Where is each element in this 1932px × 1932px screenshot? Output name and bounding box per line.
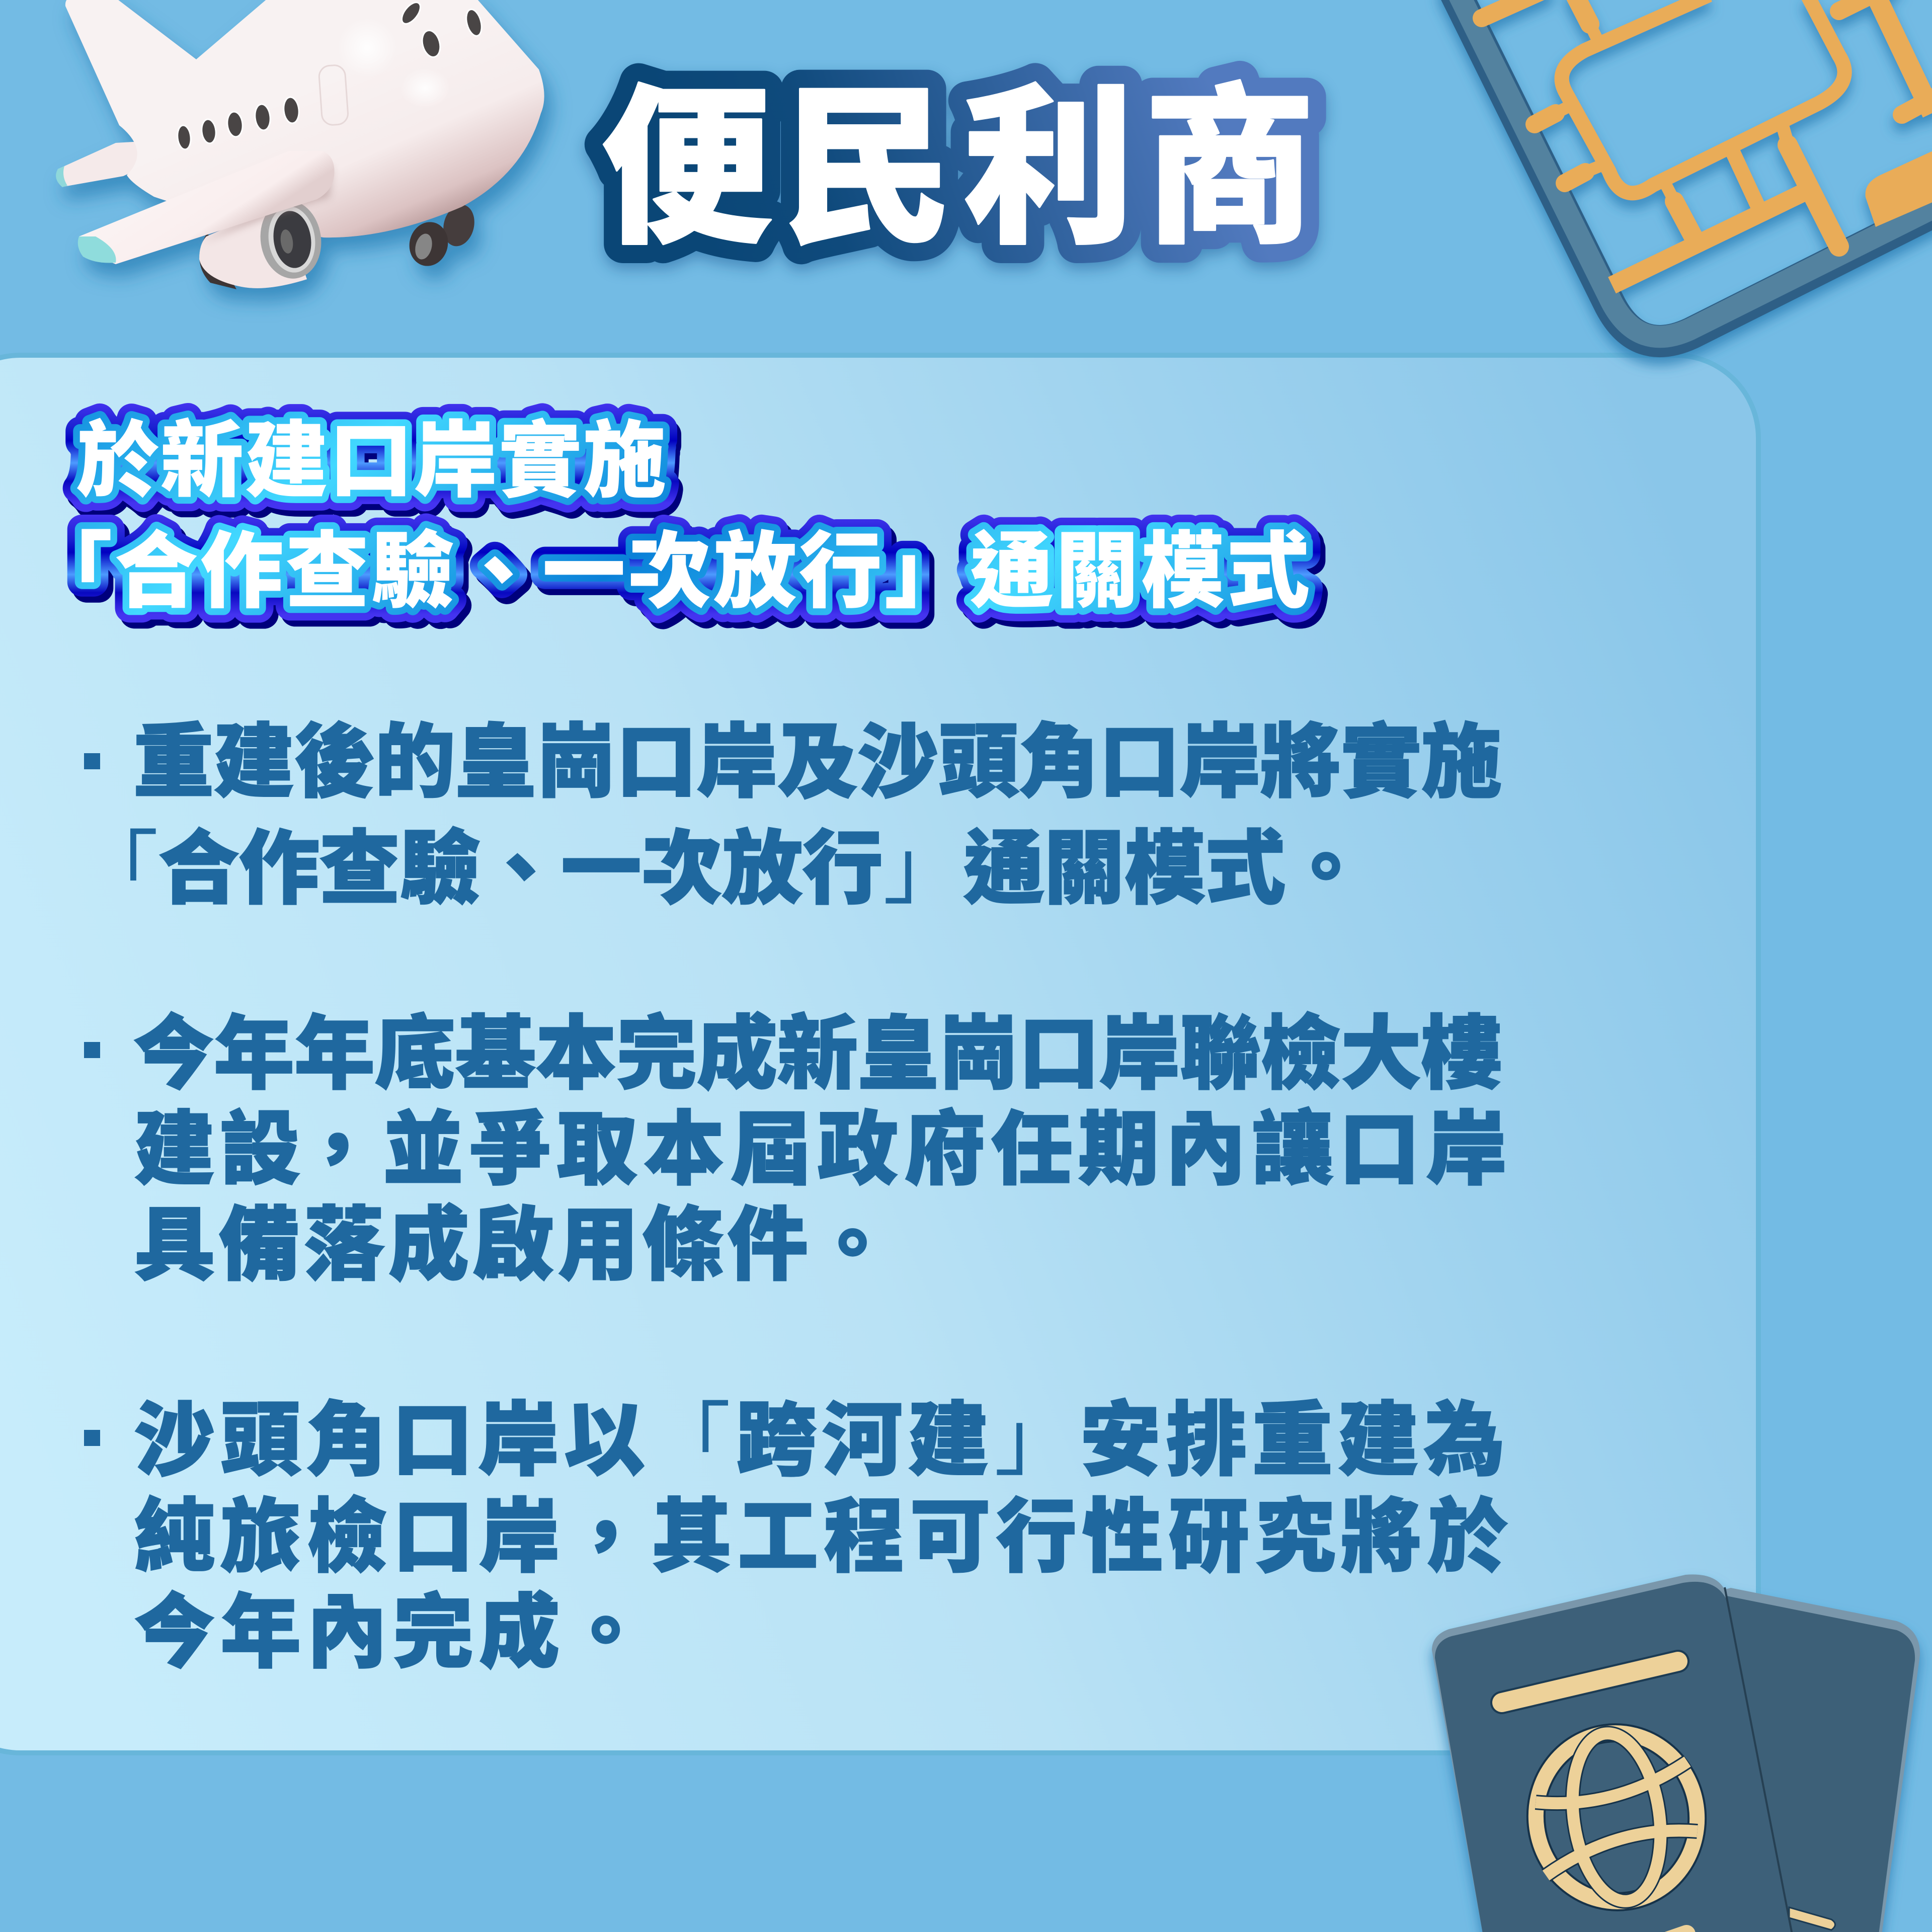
bullet item 3: [84, 1395, 1513, 1677]
title: 便民利商: [601, 79, 1325, 271]
plane windows: [177, 0, 485, 150]
subheading line 1: 於新建口岸實施: [76, 415, 668, 507]
subheading line 1: 於新建口岸實施: [80, 421, 672, 513]
subheading line 1: 於新建口岸實施: [76, 415, 668, 507]
plane stabilizer tip: [56, 166, 67, 187]
bullet item 3: 純旅檢口岸，其工程可行性研究將於: [134, 1492, 1513, 1582]
panel: main content card: [0, 353, 1761, 1755]
bullet item 1: 重建後的皇崗口岸及沙頭角口岸將實施: [133, 717, 1502, 807]
title: 便民利商: [601, 73, 1325, 265]
subheading line 2: 「合作查驗、一次放行」通關模式: [29, 525, 1312, 618]
subheading line 2: 「合作查驗、一次放行」通關模式: [34, 531, 1317, 624]
bullet item 2: [84, 1009, 1513, 1290]
title: 便民利商: [601, 73, 1325, 265]
subheading line 2: 「合作查驗、一次放行」通關模式: [29, 525, 1312, 618]
plane highlights: [337, 18, 450, 108]
icon: toy airplane: [56, 0, 544, 289]
plane door: [318, 64, 349, 126]
bullet item 3: 沙頭角口岸以「跨河建」安排重建為: [134, 1395, 1510, 1485]
bullet item 2: 具備落成啟用條件。: [134, 1200, 897, 1290]
plane rear stabilizer: [56, 141, 151, 187]
sprue orange parts: [1482, 0, 1932, 285]
plane wing: [79, 151, 334, 264]
bullet item 3: 今年內完成。: [134, 1587, 652, 1677]
bullet item 1: 「合作查驗、一次放行」通關模式。: [78, 824, 1366, 914]
subheading line 1: 於新建口岸實施: [76, 415, 668, 507]
plane wing tip: [78, 236, 116, 263]
passport title bar: [1502, 1661, 1678, 1703]
bullet item 2: 建設，並爭取本屆政府任期內讓口岸: [134, 1104, 1513, 1194]
back passport: [1723, 1588, 1920, 1932]
front passport: [1432, 1574, 1794, 1932]
subheading: 於新建口岸實施 「合作查驗、一次放行」通關模式: [29, 415, 1317, 624]
passport globe emblem: [1525, 1722, 1708, 1912]
subheading line 2: 「合作查驗、一次放行」通關模式: [29, 525, 1312, 618]
icon: model kit sprue frame: [1454, 0, 1932, 341]
plane wing shadow: [201, 166, 332, 243]
plane fuselage: [65, 0, 544, 237]
icon: passports: [1432, 1574, 1920, 1932]
bullet item 2: 今年年底基本完成新皇崗口岸聯檢大樓: [133, 1009, 1502, 1099]
sprue frame rail: [1454, 0, 1932, 341]
plane engine: [199, 196, 326, 289]
plane wheels: [405, 201, 478, 270]
bullet item 1: [78, 717, 1502, 914]
sprue orange plate: [1866, 149, 1932, 227]
